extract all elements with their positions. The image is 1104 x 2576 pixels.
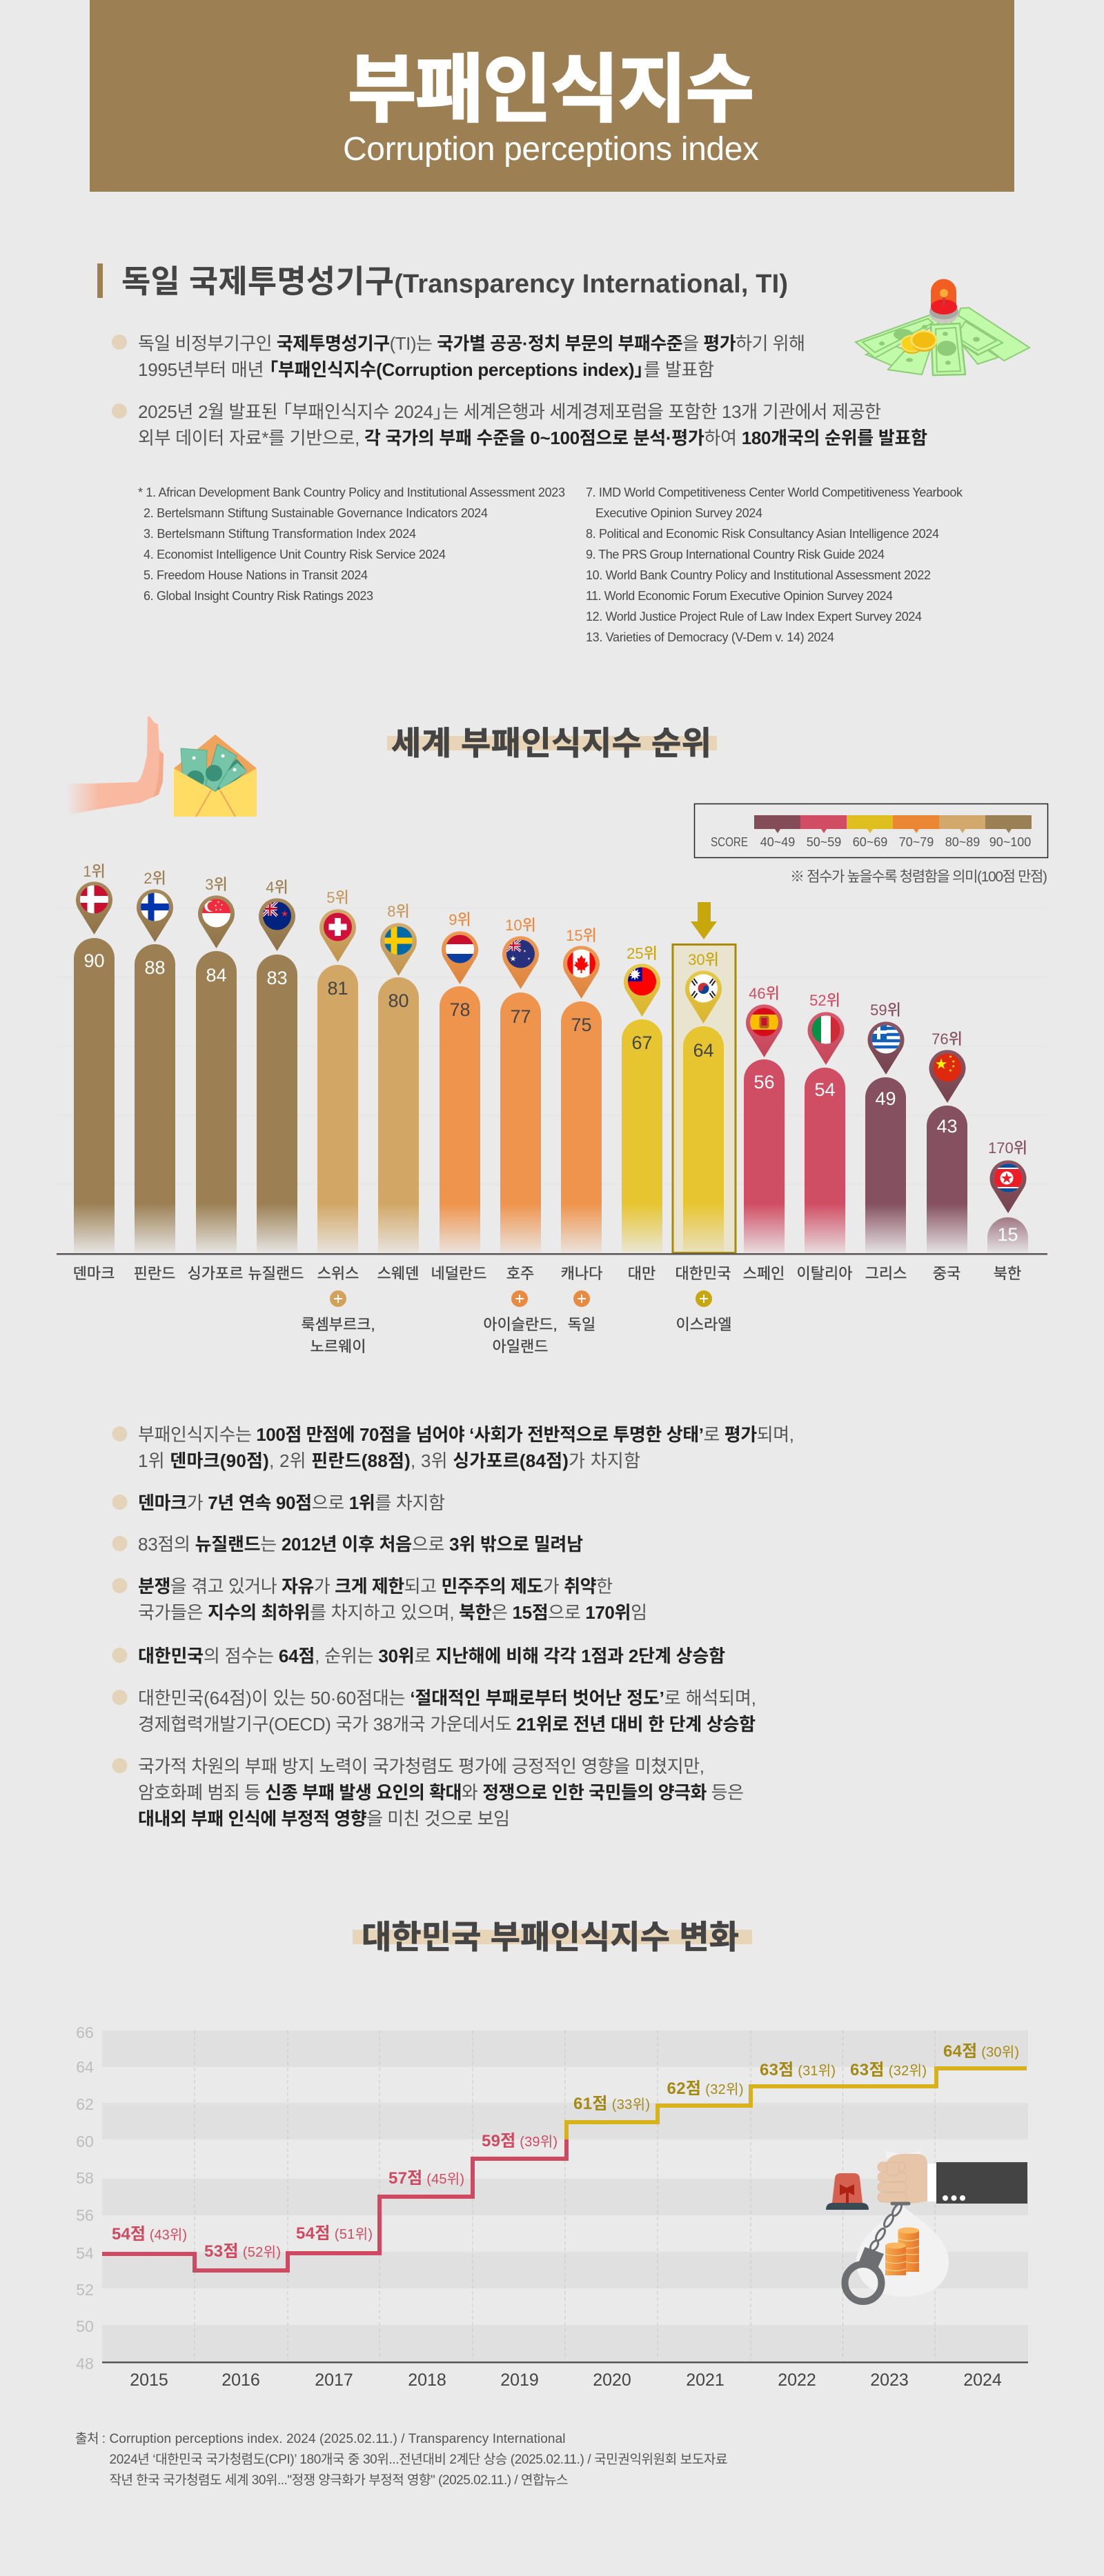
year labels: 2023	[870, 2370, 909, 2390]
paragraph 2 line 2: 외부 데이터 자료*를 기반으로, 각 국가의 부패 수준을 0~100점으로 분석·평가하여 180개국의 순위를 발표함	[138, 428, 927, 448]
baseline	[102, 2362, 1028, 2363]
data labels: 57점 (45위)	[388, 2169, 464, 2188]
rank labels: 2위	[144, 870, 166, 887]
data labels: 63점 (31위)	[760, 2061, 836, 2079]
score values	[83, 950, 1018, 1245]
data labels: 62점 (32위)	[667, 2079, 744, 2098]
axis labels: 58	[76, 2169, 94, 2187]
score values: 15	[997, 1224, 1018, 1245]
axis labels: 66	[76, 2024, 94, 2041]
section heading: 독일 국제투명성기구(Transparency International, TI)	[121, 263, 788, 299]
tied countries: plus markers and names: 아일랜드	[493, 1338, 548, 1355]
section title: world ranking: 세계 부패인식지수 순위	[391, 725, 711, 761]
year labels: 2021	[686, 2370, 724, 2390]
year labels: 2022	[778, 2370, 816, 2390]
country labels: 뉴질랜드	[248, 1265, 304, 1282]
finding: lowest ranked: 국가들은 지수의 최하위를 차지하고 있으며, 북한은 15점으로 170위임	[138, 1602, 647, 1623]
country labels: 스페인	[743, 1265, 785, 1282]
title: 부패인식지수	[348, 48, 754, 131]
rank labels: 1위	[83, 863, 106, 880]
bullet marker	[112, 1648, 127, 1663]
rank labels: 10위	[505, 917, 536, 934]
header banner	[90, 0, 1014, 192]
legend: score colour scale: 70~79	[899, 835, 934, 849]
finding: causes: 국가적 차원의 부패 방지 노력이 국가청렴도 평가에 긍정적인 영향을 미쳤지만,	[138, 1756, 704, 1777]
footnote: data sources: 13. Varieties of Democracy (V-Dem v. 14) 2024	[586, 630, 834, 644]
rank labels: 5위	[326, 889, 349, 906]
rank labels: 9위	[448, 911, 471, 928]
chart bands	[102, 2030, 1028, 2362]
country labels: 북한	[994, 1265, 1021, 1282]
score values: 64	[693, 1040, 714, 1061]
illustration: bribe bag, handcuffs, siren	[826, 2150, 1027, 2302]
score values: 54	[814, 1079, 836, 1100]
legend: score colour scale: 90~100	[989, 835, 1031, 849]
pin: Sweden	[380, 923, 417, 976]
bullet marker 1	[112, 335, 127, 350]
pin: Singapore	[198, 895, 235, 948]
rank labels: 3위	[205, 876, 228, 893]
score values: 78	[449, 999, 471, 1020]
bars	[74, 938, 1028, 1252]
icon: money and siren	[856, 279, 1029, 375]
pin: Canada	[563, 946, 600, 999]
highlight box: South Korea	[673, 945, 736, 1252]
finding: 70 point threshold: 부패인식지수는 100점 만점에 70점을 넘어야 ‘사회가 전반적으로 투명한 상태’로 평가되며,	[138, 1424, 794, 1445]
paragraph 1 line 2: 1995년부터 매년 「부패인식지수(Corruption perceptions index)」를 발표함	[138, 359, 714, 380]
sources: Corruption perceptions index. 2024 (2025.02.11.) / Transparency International	[109, 2432, 566, 2446]
data labels: 54점 (51위)	[296, 2224, 373, 2243]
pin: New Zealand	[259, 898, 295, 951]
footnote: data sources: 3. Bertelsmann Stiftung Transformation Index 2024	[144, 527, 416, 541]
score values: 80	[388, 990, 409, 1011]
axis labels: 60	[76, 2133, 94, 2150]
finding: lowest ranked: 분쟁을 겪고 있거나 자유가 크게 제한되고 민주주의 제도가 취약한	[138, 1576, 613, 1597]
baseline	[57, 1253, 1047, 1255]
rank labels: 170위	[988, 1139, 1027, 1157]
data labels: 64점 (30위)	[943, 2042, 1019, 2061]
rank labels: 25위	[627, 945, 658, 962]
footnote: data sources: 4. Economist Intelligence Unit Country Risk Service 2024	[144, 548, 446, 561]
data labels: 53점 (52위)	[204, 2242, 281, 2261]
rank labels: 52위	[809, 992, 840, 1009]
footnote: data sources: 12. World Justice Project Rule of Law Index Expert Survey 2024	[586, 610, 922, 623]
icon: hand refusing money envelope	[66, 717, 257, 817]
country labels: 스위스	[317, 1265, 359, 1282]
legend note: ※ 점수가 높을수록 청렴함을 의미(100점 만점)	[790, 869, 1047, 885]
tied countries: plus markers and names: 룩셈부르크,	[301, 1316, 375, 1333]
bullet marker	[112, 1758, 127, 1773]
legend: score colour scale: 50~59	[807, 835, 841, 849]
year labels	[130, 2370, 1002, 2390]
country labels: 중국	[933, 1265, 960, 1282]
bullet marker	[112, 1426, 127, 1441]
finding: 70 point threshold: 1위 덴마크(90점), 2위 핀란드(88점), 3위 싱가포르(84점)가 차지함	[138, 1450, 640, 1471]
bullet marker 2	[112, 403, 127, 419]
footnote: data sources: 11. World Economic Forum Executive Opinion Survey 2024	[586, 589, 893, 603]
score values: 84	[206, 965, 227, 986]
score values: 67	[631, 1032, 653, 1053]
year labels: 2018	[408, 2370, 446, 2390]
bullet marker	[112, 1536, 127, 1551]
axis labels: 54	[76, 2244, 94, 2262]
pin: North Korea	[989, 1160, 1027, 1213]
finding: OECD position: 대한민국(64점)이 있는 50·60점대는 ‘절대적인 부패로부터 벗어난 정도’로 해석되며,	[138, 1688, 756, 1708]
rank labels: 46위	[749, 985, 780, 1002]
legend: score colour scale: 80~89	[945, 835, 980, 849]
sources	[75, 2431, 727, 2488]
score values: 56	[753, 1072, 775, 1092]
footnote: data sources: 10. World Bank Country Policy and Institutional Assessment 2022	[586, 568, 931, 582]
finding: New Zealand: 83점의 뉴질랜드는 2012년 이후 처음으로 3위 밖으로 밀려남	[138, 1534, 583, 1555]
tied countries: plus markers and names: 이스라엘	[676, 1316, 731, 1333]
year labels: 2015	[130, 2370, 168, 2390]
step chart: Korea score 2015-2024	[76, 2024, 1028, 2390]
footnote: data sources: 2. Bertelsmann Stiftung Sustainable Governance Indicators 2024	[144, 506, 488, 520]
sources: 작년 한국 국가청렴도 세계 30위..."정쟁 양극화가 부정적 영향" (2025.02.11.) / 연합뉴스	[109, 2473, 569, 2488]
data labels	[112, 2042, 1019, 2261]
score values: 81	[327, 978, 348, 999]
tied countries: plus markers and names: 노르웨이	[310, 1338, 366, 1355]
rank labels: 30위	[688, 951, 719, 968]
sources: 출처 :	[75, 2431, 106, 2446]
finding: causes: 대내외 부패 인식에 부정적 영향을 미친 것으로 보임	[138, 1808, 510, 1829]
panel: key findings	[112, 1424, 794, 1829]
pin: China	[929, 1050, 966, 1103]
legend: score colour scale: 60~69	[853, 835, 887, 849]
country labels: 대만	[628, 1265, 656, 1282]
panel: about Transparency International	[97, 263, 927, 448]
footnote: data sources: 7. IMD World Competitiveness Center World Competitiveness Yearbook	[586, 486, 963, 499]
section title: Korea trend: 대한민국 부패인식지수 변화	[362, 1919, 739, 1955]
pin: Italy	[807, 1012, 845, 1065]
rank labels: 8위	[387, 903, 410, 920]
axis labels: 52	[76, 2281, 94, 2299]
country labels: 덴마크	[73, 1265, 115, 1282]
finding: lowest ranked	[138, 1576, 647, 1623]
data labels: 54점 (43위)	[112, 2225, 187, 2244]
data labels: 63점 (32위)	[850, 2061, 927, 2079]
pin: Spain	[746, 1004, 782, 1057]
legend: score colour scale: 40~49	[760, 835, 795, 849]
finding: Denmark: 덴마크가 7년 연속 90점으로 1위를 차지함	[138, 1492, 445, 1513]
axis labels: 56	[76, 2206, 94, 2224]
rank labels	[83, 863, 1027, 1157]
bullet marker	[112, 1690, 127, 1705]
rank labels: 15위	[566, 927, 597, 944]
finding: OECD position: 경제협력개발기구(OECD) 국가 38개국 가운데서도 21위로 전년 대비 한 단계 상승함	[138, 1714, 756, 1735]
score values: 77	[510, 1006, 531, 1027]
footnote: data sources: 5. Freedom House Nations in Transit 2024	[144, 568, 368, 582]
paragraph 2 line 1: 2025년 2월 발표된 「부패인식지수 2024」는 세계은행과 세계경제포럼을 포함한 13개 기관에서 제공한	[138, 401, 881, 422]
country labels: 네덜란드	[431, 1265, 486, 1282]
step line: red	[102, 2139, 566, 2270]
paragraph 1 line 1: 독일 비정부기구인 국제투명성기구(TI)는 국가별 공공·정치 부문의 부패수준을 평가하기 위해	[138, 333, 805, 354]
pin: Netherlands	[442, 931, 478, 984]
pin: Denmark	[76, 881, 112, 935]
pin: Finland	[137, 889, 173, 942]
score values: 88	[144, 957, 166, 978]
rank labels: 4위	[266, 879, 288, 896]
country labels: 이탈리아	[797, 1265, 852, 1282]
country labels: 싱가포르	[188, 1265, 243, 1282]
finding: causes: 암호화폐 범죄 등 신종 부패 발생 요인의 확대와 정쟁으로 인한 국민들의 양극화 등은	[138, 1782, 744, 1803]
year labels: 2019	[500, 2370, 539, 2390]
bullet marker	[112, 1578, 127, 1593]
score values: 90	[83, 950, 105, 971]
pin: Switzerland	[319, 909, 356, 962]
finding: 70 point threshold	[138, 1424, 794, 1471]
year labels: 2024	[963, 2370, 1002, 2390]
axis labels: 62	[76, 2095, 94, 2113]
footnote: data sources: 6. Global Insight Country Risk Ratings 2023	[144, 589, 373, 603]
footnote: data sources: * 1. African Development Bank Country Policy and Institutional Assessment 2023	[138, 486, 565, 499]
year labels: 2020	[593, 2370, 631, 2390]
score values: 43	[936, 1116, 958, 1137]
tied countries: plus markers and names	[301, 1290, 731, 1355]
finding: OECD position	[138, 1688, 756, 1735]
country labels: 호주	[506, 1265, 534, 1282]
axis labels: 64	[76, 2058, 94, 2076]
subtitle: Corruption perceptions index	[343, 131, 759, 168]
pin: South Korea	[685, 970, 722, 1024]
finding: causes	[138, 1756, 744, 1829]
country labels: 대한민국	[676, 1265, 731, 1282]
score values: 49	[875, 1088, 896, 1109]
score values: 83	[266, 968, 288, 988]
tied countries: plus markers and names: 아이슬란드,	[483, 1316, 558, 1333]
bullet marker	[112, 1495, 127, 1510]
pin: Greece	[868, 1021, 904, 1075]
rank labels: 76위	[931, 1030, 963, 1048]
legend: score colour scale	[694, 804, 1047, 858]
heading accent bar	[97, 263, 103, 298]
axis labels	[76, 2024, 94, 2373]
footnote: data sources: 9. The PRS Group International Country Risk Guide 2024	[586, 548, 885, 561]
axis labels: 48	[76, 2355, 94, 2373]
data labels: 59점 (39위)	[482, 2132, 558, 2150]
footnote: data sources: 8. Political and Economic Risk Consultancy Asian Intelligence 2024	[586, 527, 939, 541]
country labels: 핀란드	[134, 1265, 175, 1282]
country labels: 스웨덴	[377, 1265, 419, 1282]
pin: Taiwan	[624, 963, 660, 1017]
data labels: 61점 (33위)	[573, 2095, 650, 2113]
year labels: 2017	[315, 2370, 353, 2390]
footnote: data sources: Executive Opinion Survey 2024	[595, 506, 762, 520]
country labels	[73, 1265, 1021, 1282]
score values: 75	[571, 1015, 592, 1035]
country labels: 그리스	[865, 1265, 907, 1282]
country labels: 캐나다	[561, 1265, 602, 1282]
year labels: 2016	[221, 2370, 260, 2390]
bar chart: country scores	[57, 863, 1047, 1255]
axis labels: 50	[76, 2317, 94, 2335]
rank labels: 59위	[870, 1001, 901, 1019]
legend: score colour scale: SCORE	[711, 835, 748, 849]
footnote: data sources	[138, 486, 963, 644]
sources: 2024년 ‘대한민국 국가청렴도(CPI)’ 180개국 중 30위...전년대비 2계단 상승 (2025.02.11.) / 국민권익위원회 보도자료	[109, 2452, 727, 2467]
pin: Australia	[502, 936, 539, 989]
finding: South Korea score: 대한민국의 점수는 64점, 순위는 30위로 지난해에 비해 각각 1점과 2단계 상승함	[138, 1646, 725, 1666]
step line: yellow	[566, 2068, 1027, 2139]
tied countries: plus markers and names: 독일	[568, 1316, 595, 1333]
arrow: points at South Korea	[691, 902, 717, 939]
